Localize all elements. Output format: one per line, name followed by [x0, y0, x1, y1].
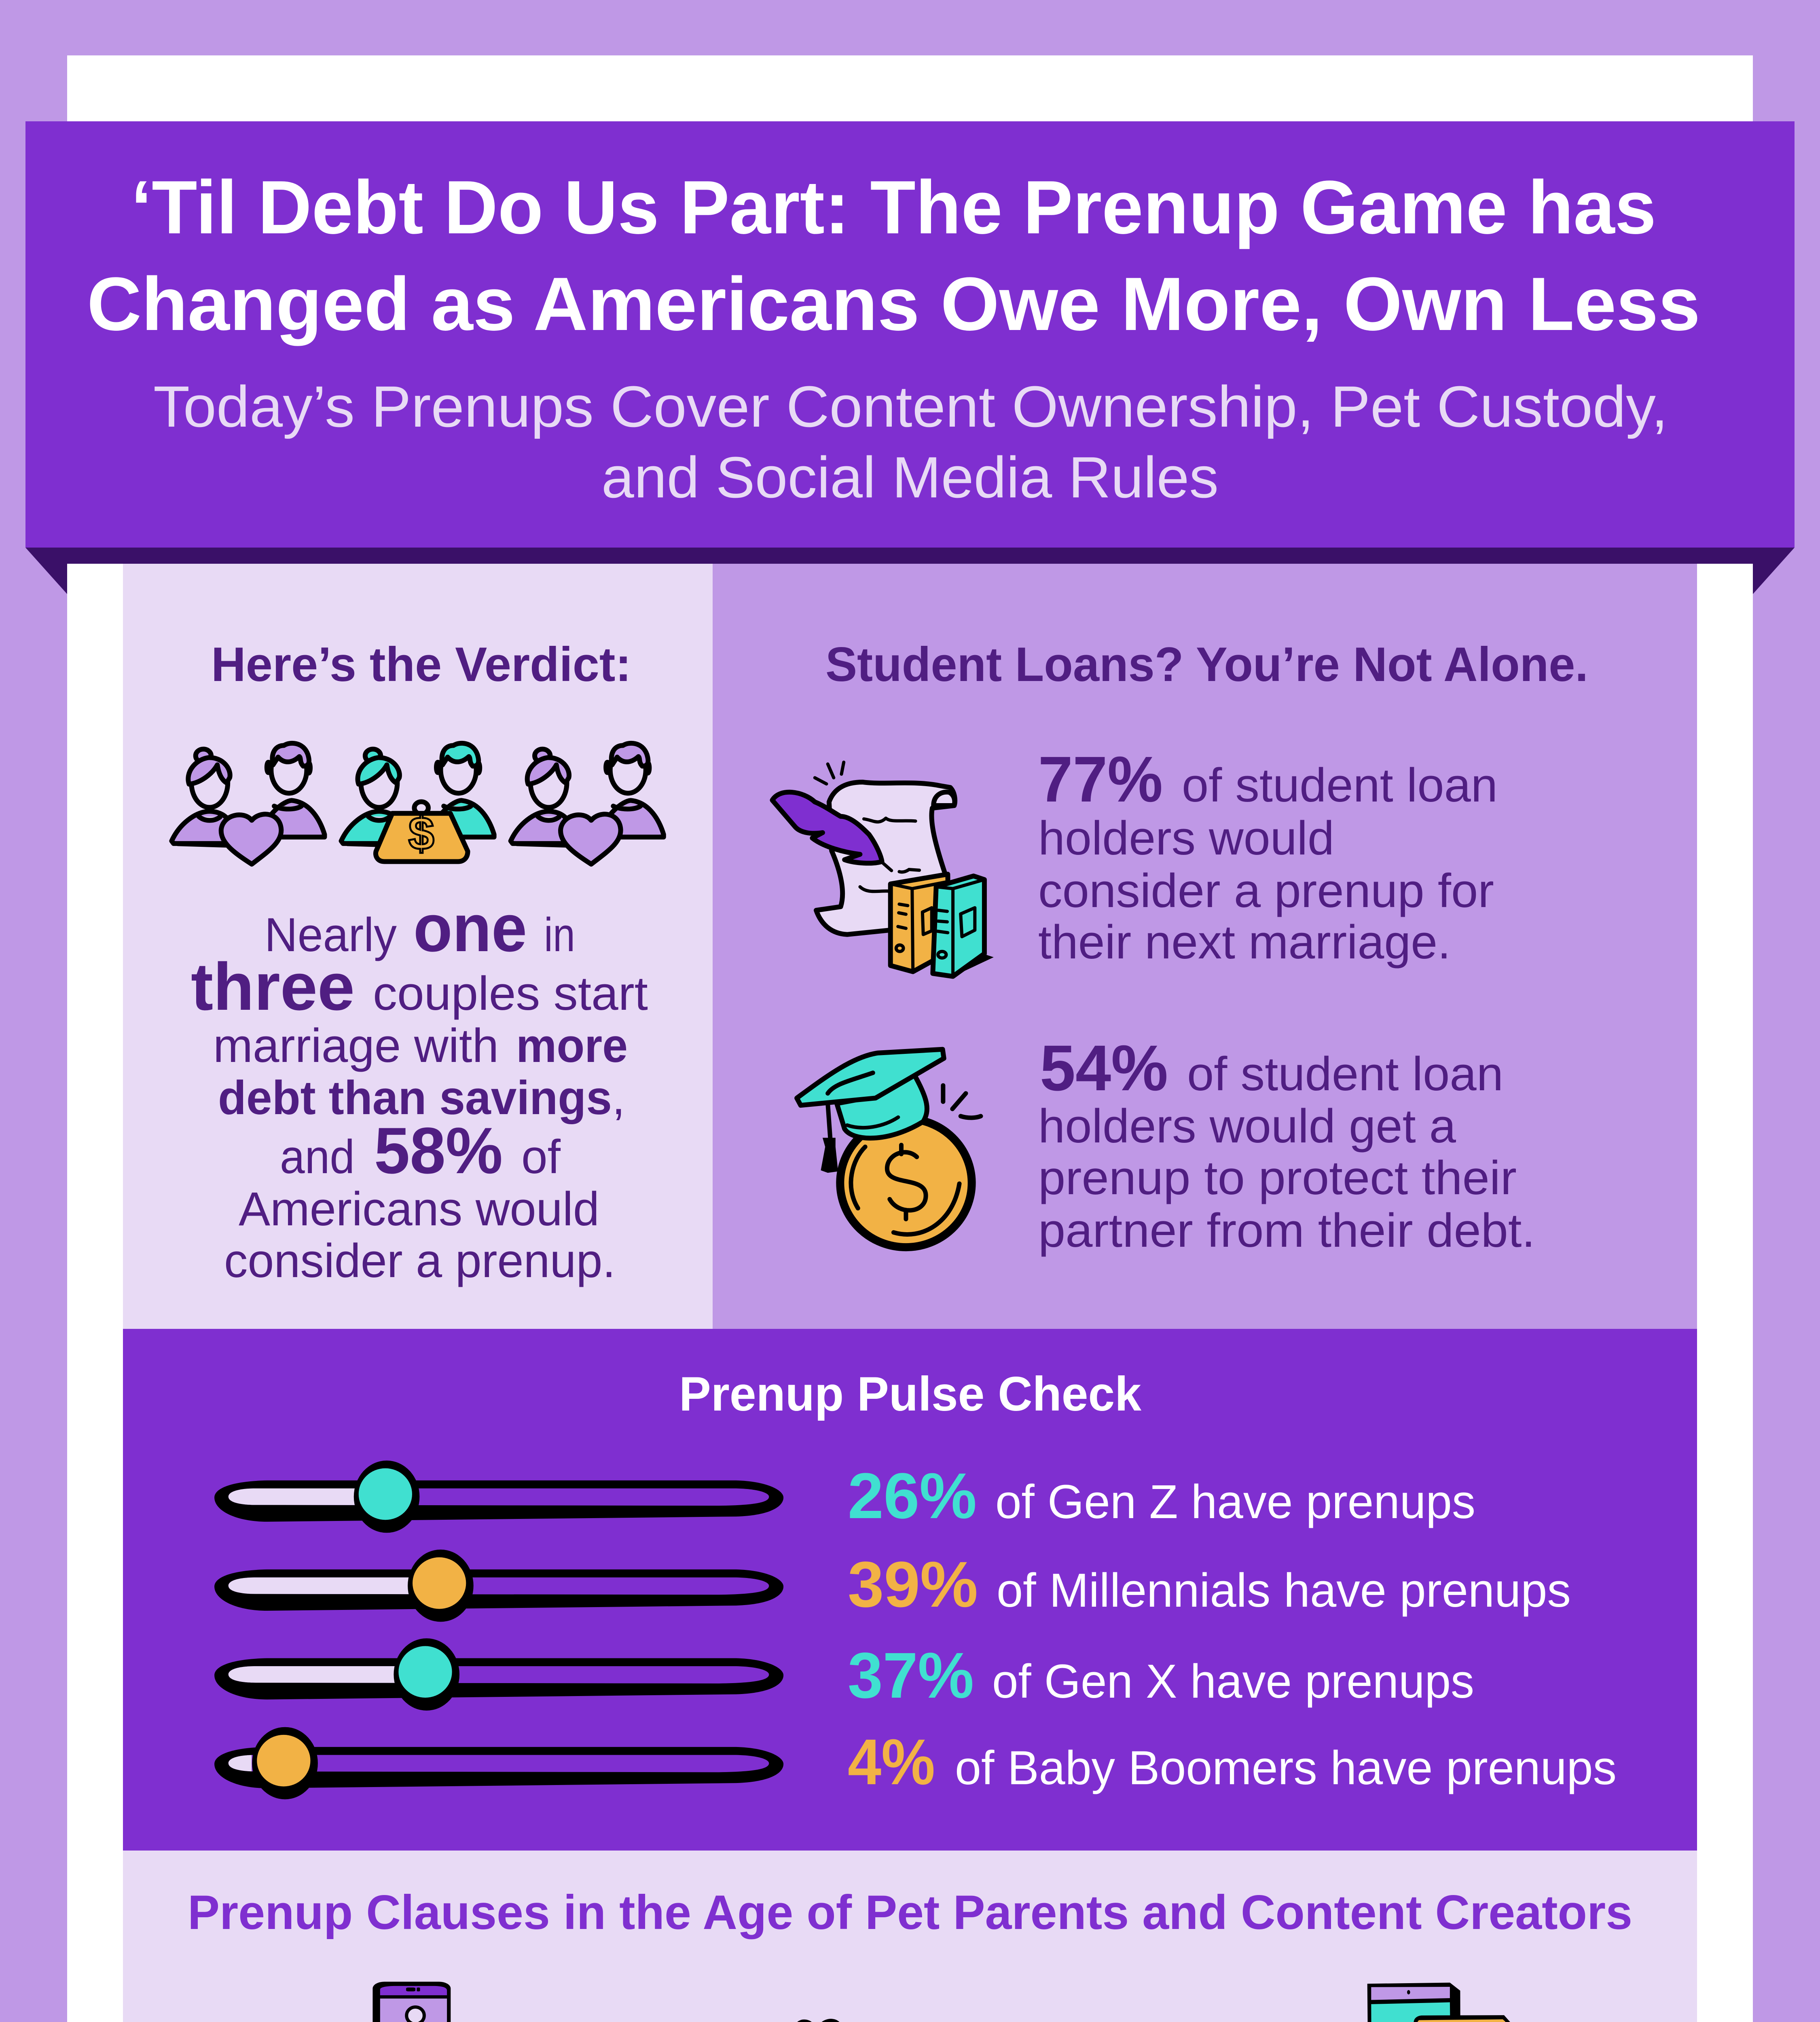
text: verdict statement: more	[516, 1019, 628, 1072]
title banner	[25, 121, 1795, 548]
text: 54 percent stat: of student loan	[1187, 1047, 1503, 1101]
text: verdict statement: one	[413, 891, 527, 966]
banner ribbon fold	[25, 548, 1795, 594]
text: 77 percent stat: 77%	[1038, 743, 1163, 815]
stat: Millennials: 39%	[848, 1548, 978, 1620]
text: 77 percent stat: holders would	[1038, 812, 1334, 865]
text: 54 percent stat	[1038, 1032, 1535, 1257]
stat: Gen Z: of Gen Z have prenups	[995, 1475, 1475, 1529]
text: 77 percent stat: their next marriage.	[1038, 916, 1451, 969]
text: verdict statement: three	[191, 950, 355, 1024]
text: verdict statement: marriage with	[213, 1019, 499, 1072]
panel: student loans	[713, 564, 1697, 1329]
text: 77 percent stat: of student loan	[1182, 759, 1498, 812]
heading: prenup clauses: Prenup Clauses in the Age of Pet Parents and Content Creators	[188, 1885, 1632, 1940]
panel: prenup clauses	[123, 1851, 1697, 2022]
heading: student loans: Student Loans? You’re Not Alone.	[825, 637, 1588, 692]
stat: Gen X: of Gen X have prenups	[992, 1655, 1474, 1708]
stat: Gen Z	[848, 1459, 1475, 1532]
text: 77 percent stat: consider a prenup for	[1038, 864, 1494, 918]
text: verdict statement: ,	[612, 1071, 625, 1125]
icon: graduation cap on coin	[797, 1049, 981, 1247]
heading: verdict: Here’s the Verdict:	[211, 637, 631, 692]
stat: Millennials	[848, 1548, 1571, 1620]
icon: money bag	[376, 802, 468, 862]
icon: heart	[561, 814, 621, 864]
stat: Baby Boomers	[848, 1726, 1617, 1798]
title: Changed as Americans Owe More, Own Less	[87, 262, 1700, 346]
subtitle: and Social Media Rules	[601, 445, 1219, 510]
text: 54 percent stat: partner from their debt.	[1038, 1204, 1535, 1257]
text: verdict statement: of	[521, 1130, 561, 1184]
icon: scroll, quill and books	[772, 762, 994, 976]
icon: poodle and golden dog with paw	[746, 2021, 1073, 2022]
text: verdict statement: 58%	[374, 1114, 503, 1187]
stat: Gen Z: 26%	[848, 1459, 977, 1532]
text: verdict statement: Nearly	[265, 908, 397, 962]
stat: Baby Boomers: 4%	[848, 1726, 935, 1798]
text: 54 percent stat: 54%	[1040, 1032, 1168, 1104]
subtitle	[153, 374, 1668, 510]
title: ‘Til Debt Do Us Part: The Prenup Game has	[131, 165, 1656, 250]
slider: Millennials	[214, 1550, 783, 1622]
chart: generation sliders	[214, 1461, 783, 1799]
title	[87, 165, 1700, 346]
subtitle: Today’s Prenups Cover Content Ownership, Pet Custody,	[153, 374, 1668, 439]
slider: Gen X	[214, 1638, 783, 1711]
stat: Gen X: 37%	[848, 1639, 974, 1711]
text: verdict statement: Americans would	[239, 1182, 599, 1236]
heading: pulse check: Prenup Pulse Check	[679, 1367, 1141, 1421]
icon: phone with speech bubble	[1367, 1983, 1513, 2022]
panel: verdict	[123, 564, 713, 1329]
text: verdict statement: consider a prenup.	[224, 1234, 616, 1288]
slider: Baby Boomers	[214, 1727, 783, 1799]
text: verdict statement	[191, 891, 648, 1288]
icon: heart	[221, 814, 281, 864]
text: verdict statement: in	[544, 908, 575, 962]
text: 54 percent stat: holders would get a	[1038, 1100, 1456, 1153]
icon: three couples with hearts and money bag	[171, 743, 664, 864]
text: 77 percent stat	[1038, 743, 1498, 969]
icon: creator devices and hand	[286, 1982, 511, 2022]
slider: Gen Z	[214, 1461, 783, 1533]
panel: prenup pulse check	[123, 1329, 1697, 1851]
text: verdict statement: and	[280, 1130, 355, 1184]
stat: Millennials: of Millennials have prenups	[997, 1564, 1571, 1617]
stat: Gen X	[848, 1639, 1474, 1711]
icon: money bag: $	[408, 808, 434, 860]
text: verdict statement: couples start	[373, 967, 648, 1020]
icon: poodle	[746, 2021, 923, 2022]
stat: Baby Boomers: of Baby Boomers have prenups	[955, 1741, 1617, 1795]
text: verdict statement: debt than savings	[218, 1071, 612, 1125]
icon: speech bubble	[1412, 2015, 1513, 2022]
text: 54 percent stat: prenup to protect their	[1038, 1151, 1517, 1205]
